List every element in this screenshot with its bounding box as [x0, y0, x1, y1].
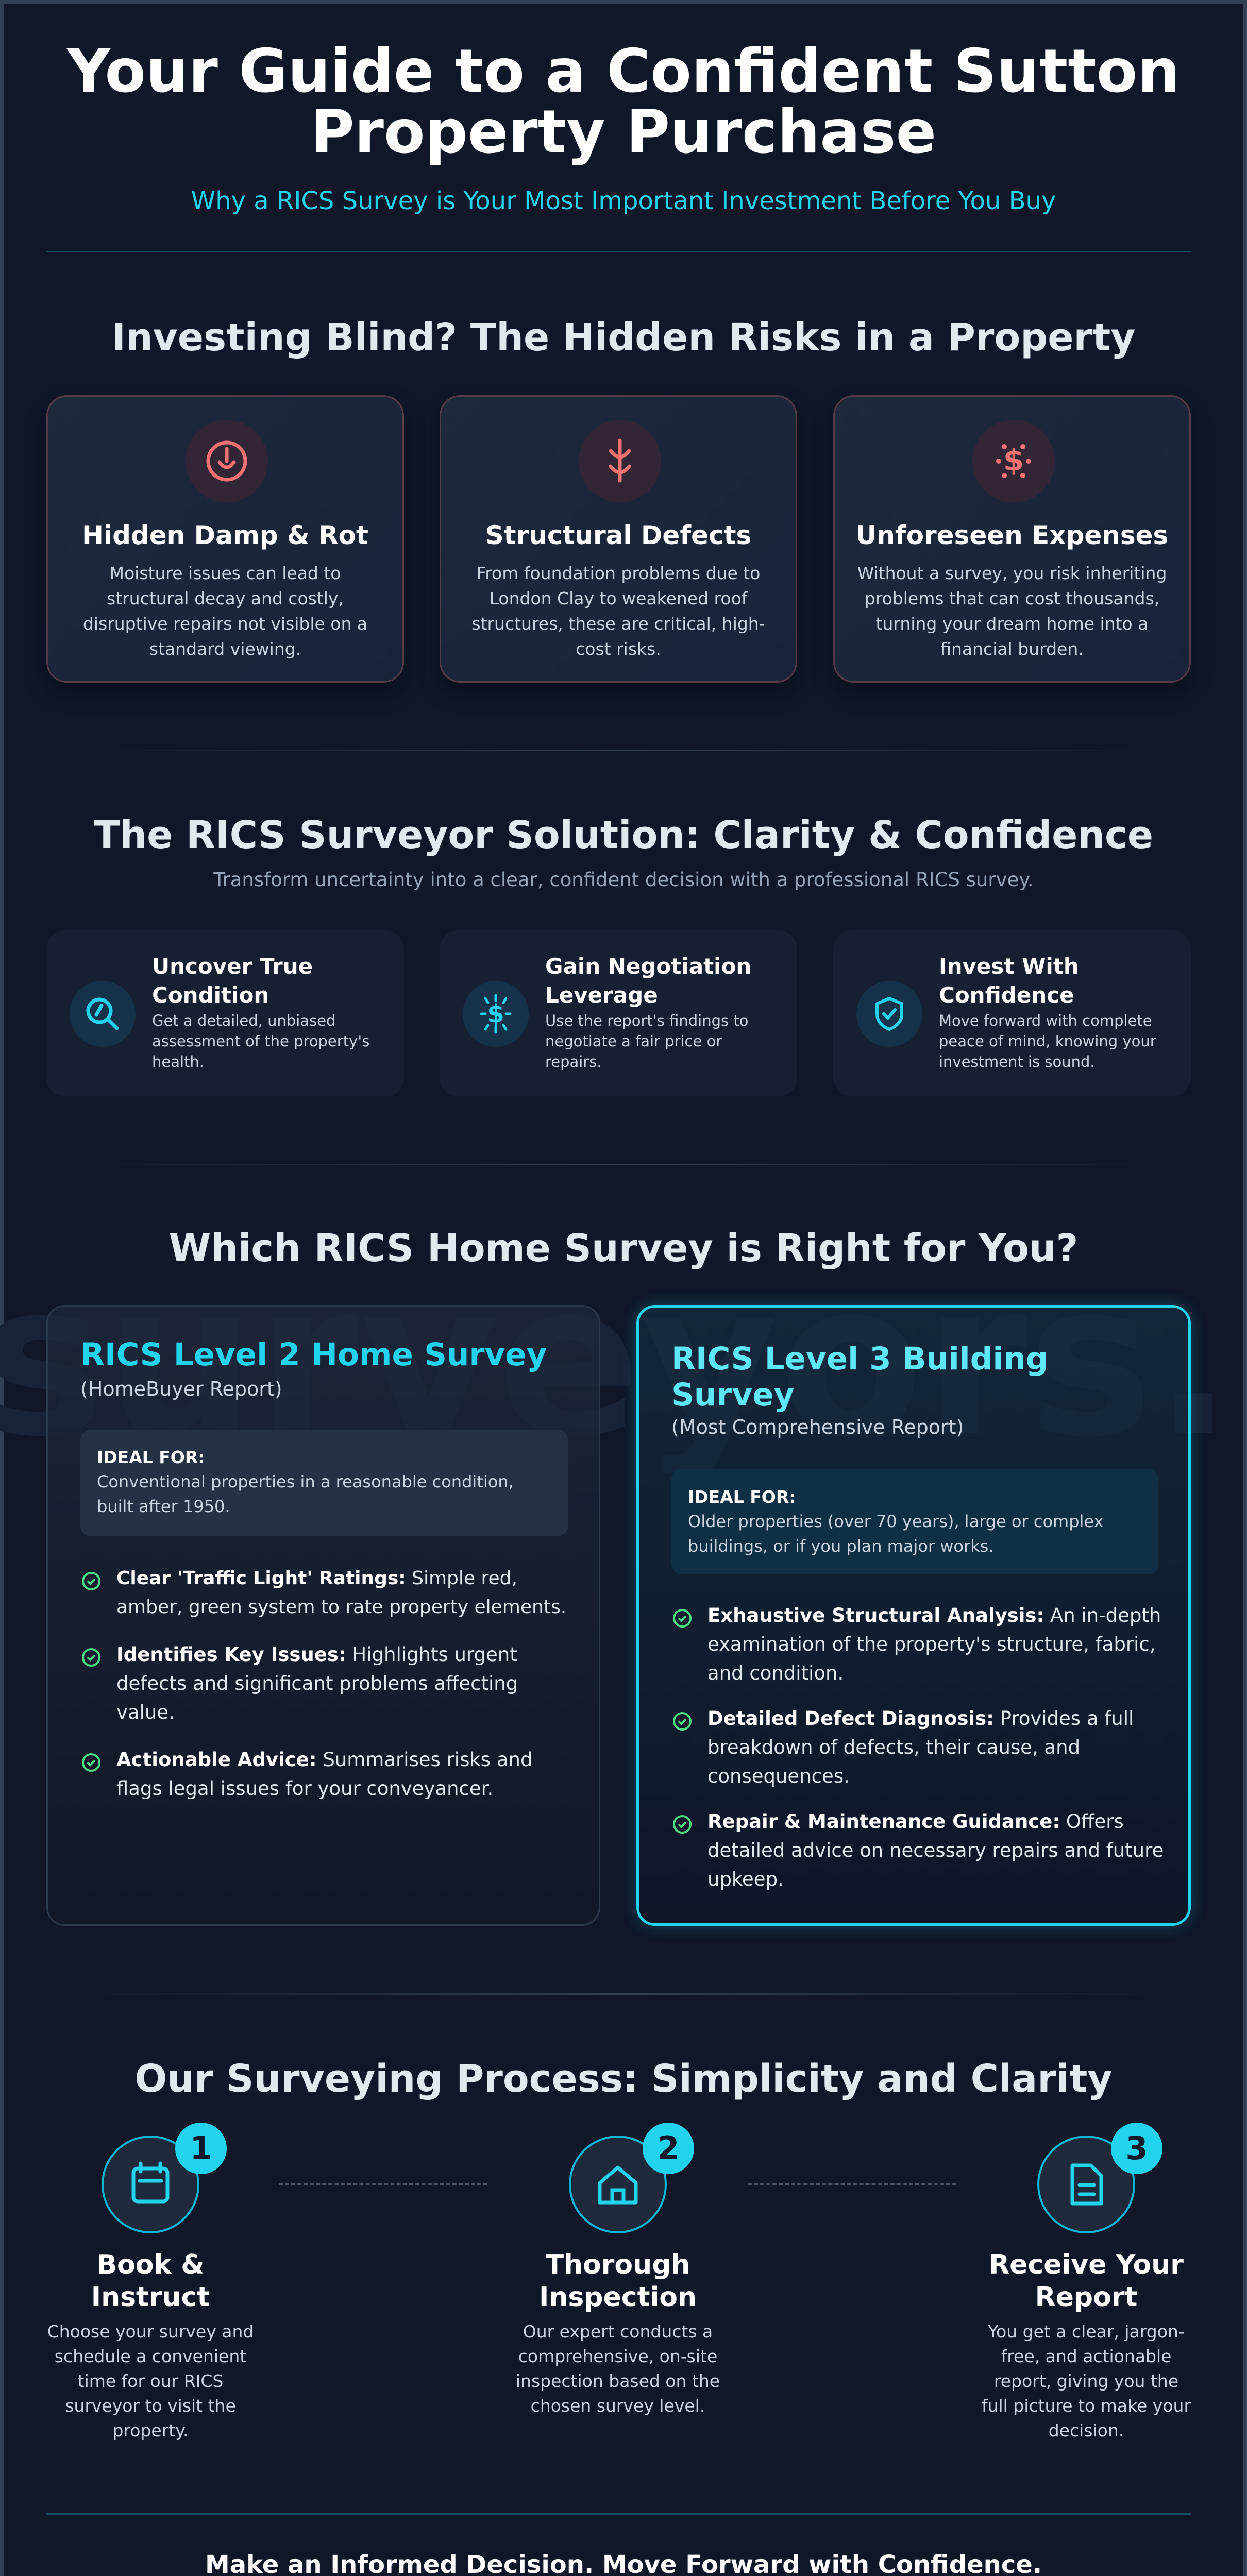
arrow: dashed 1-2 — [279, 2183, 487, 2185]
icon: house — [569, 2136, 667, 2233]
text: 3 — [1125, 2129, 1148, 2167]
icon: shield — [856, 981, 922, 1047]
text: Receive Your — [989, 2249, 1184, 2280]
bullets L3: upkeep. — [707, 1868, 784, 1890]
bullets L3: Detailed Defect Diagnosis: Provides a full — [707, 1707, 1134, 1730]
heading: process: Our Surveying Process: Simplicity and Clarity — [134, 2057, 1113, 2101]
ideal box L2: Conventional properties in a reasonable condition, built after 1950. — [97, 1472, 514, 1516]
icon: calendar — [102, 2136, 199, 2233]
bullets L2: Identifies Key Issues: Highlights urgent — [116, 1643, 517, 1666]
bullets L3: breakdown of defects, their cause, and — [707, 1736, 1080, 1758]
icon: document — [1037, 2136, 1135, 2233]
step 3 — [982, 2123, 1191, 2441]
bullets L3: examination of the property's structure, fabric, — [707, 1633, 1155, 1655]
icon: dollar: $ — [1003, 443, 1024, 478]
title — [66, 37, 1180, 167]
text: surveyor to visit the — [65, 2396, 236, 2416]
bullets L3: detailed advice on necessary repairs and future — [707, 1839, 1164, 1861]
panel: confidence: Invest With Confidence — [939, 954, 1079, 1008]
panel: negotiation: Use the report's findings to negotiate a fair price or repairs. — [545, 1012, 748, 1071]
ideal box L3 — [671, 1469, 1158, 1574]
heading: solution: The RICS Surveyor Solution: Clarity & Confidence — [94, 813, 1153, 857]
step 2 — [516, 2123, 720, 2416]
bullets L2 — [82, 1568, 566, 1800]
bullets L3 — [673, 1604, 1164, 1890]
subtitle: Why a RICS Survey is Your Most Important Investment Before You Buy — [191, 187, 1056, 215]
level 2 title: RICS Level 2 Home Survey — [80, 1336, 547, 1373]
panel: damp — [46, 395, 404, 683]
panel: damp: Moisture issues can lead to structural decay and costly, disruptive repairs not visible on a standard viewing. — [83, 563, 367, 659]
text: Instruct — [91, 2282, 210, 2313]
text: Inspection — [539, 2282, 697, 2313]
text: 2 — [657, 2129, 680, 2167]
level 3 title: RICS Level 3 Building Survey — [671, 1341, 1048, 1413]
panel: structural: Structural Defects — [485, 520, 751, 550]
panel: level 2: (HomeBuyer Report) — [80, 1378, 282, 1400]
panel: confidence: Move forward with complete peace of mind, knowing your investment is sound. — [939, 1012, 1156, 1071]
text: 1 — [190, 2129, 212, 2167]
text: Book & — [96, 2249, 205, 2280]
panel: expenses — [833, 395, 1191, 683]
panel: expenses: Without a survey, you risk inheriting problems that can cost thousands, turning your dream home into a financial burden. — [857, 563, 1167, 659]
text: You get a clear, jargon- — [988, 2321, 1185, 2342]
panel: level 3: (Most Comprehensive Report) — [671, 1416, 964, 1438]
panel: level 2 — [46, 1305, 600, 1926]
panel: expenses: Unforeseen Expenses — [856, 520, 1168, 550]
bullets L2: flags legal issues for your conveyancer. — [116, 1777, 493, 1800]
icon: search — [70, 981, 136, 1047]
panel: level 3 — [636, 1305, 1191, 1926]
title: Property Purchase — [311, 97, 936, 167]
title: Your Guide to a Confident Sutton — [67, 37, 1180, 106]
text: comprehensive, on-site — [518, 2346, 717, 2366]
ideal box L2: IDEAL FOR: — [97, 1447, 205, 1467]
text: property. — [112, 2420, 189, 2441]
panel: negotiation — [440, 930, 797, 1096]
heading: hidden risks: Investing Blind? The Hidden Risks in a Property — [111, 315, 1136, 360]
bullets L3: Repair & Maintenance Guidance: Offers — [707, 1810, 1124, 1833]
panel: uncover: Uncover True Condition — [152, 954, 313, 1008]
heading: which survey: Which RICS Home Survey is Right for You? — [169, 1226, 1078, 1270]
icon: damp — [186, 420, 268, 502]
text: time for our RICS — [78, 2371, 223, 2391]
text: schedule a convenient — [55, 2346, 246, 2366]
step 1 — [47, 2123, 254, 2441]
panel: uncover: Get a detailed, unbiased assessment of the property's health. — [152, 1012, 369, 1071]
text: Our expert conducts a — [523, 2321, 713, 2342]
bullets L2: Actionable Advice: Summarises risks and — [116, 1749, 532, 1771]
arrow: dashed 2-3 — [748, 2183, 956, 2185]
text: Choose your survey and — [47, 2321, 254, 2342]
ideal box L2 — [80, 1430, 568, 1536]
text: inspection based on the — [516, 2371, 720, 2391]
text: chosen survey level. — [531, 2396, 705, 2416]
icon: leverage: $ — [487, 999, 504, 1028]
text: decision. — [1049, 2420, 1124, 2441]
text: Report — [1035, 2282, 1137, 2313]
bullets L2: amber, green system to rate property elements. — [116, 1597, 566, 1618]
ideal box L3: Older properties (over 70 years), large or complex buildings, or if you plan major works. — [688, 1512, 1103, 1556]
panel: structural — [440, 395, 797, 683]
bullets L3: Exhaustive Structural Analysis: An in-depth — [707, 1604, 1161, 1626]
panel: structural: From foundation problems due to London Clay to weakened roof structures, these are critical, high-cost risks. — [471, 563, 765, 659]
icon: structure — [579, 420, 661, 502]
panel: uncover — [46, 930, 404, 1096]
icon: leverage — [463, 981, 529, 1047]
panel: negotiation: Gain Negotiation Leverage — [545, 954, 751, 1008]
text: report, giving you the — [994, 2371, 1178, 2391]
bullets L3: consequences. — [707, 1765, 850, 1787]
text: full picture to make your — [982, 2396, 1191, 2416]
panel: damp: Hidden Damp & Rot — [82, 520, 368, 550]
bullets L2: defects and significant problems affecting — [116, 1672, 518, 1694]
bullets L2: Clear 'Traffic Light' Ratings: Simple red, — [116, 1568, 517, 1589]
solution subtitle: Transform uncertainty into a clear, confident decision with a professional RICS survey. — [213, 869, 1034, 891]
text: free, and actionable — [1001, 2346, 1171, 2366]
icon: dollar — [972, 420, 1055, 502]
ideal box L3: IDEAL FOR: — [688, 1487, 796, 1507]
text: Thorough — [546, 2249, 690, 2280]
bullets L3: and condition. — [707, 1662, 844, 1684]
bullets L2: value. — [116, 1701, 175, 1723]
panel: confidence — [833, 930, 1191, 1096]
